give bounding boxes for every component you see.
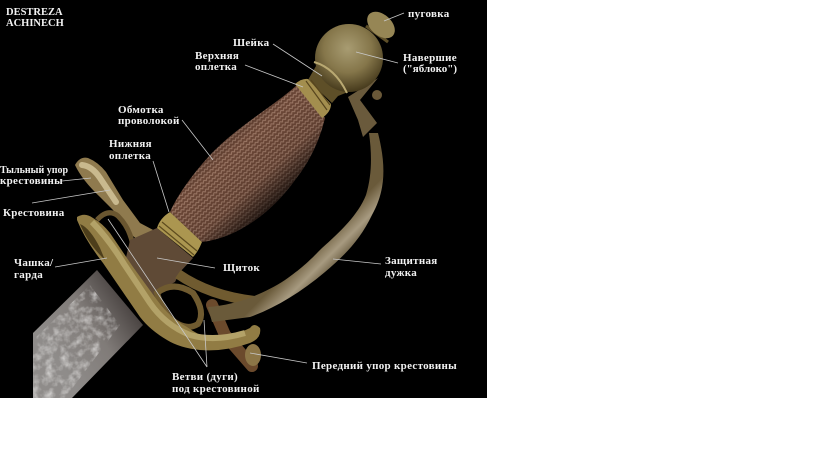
label: Щиток: Щиток xyxy=(223,262,260,274)
label: Крестовина: Крестовина xyxy=(3,207,65,219)
label: Чашка / гарда: Чашка/ xyxy=(14,257,53,269)
neck xyxy=(308,66,348,103)
front quillon tip xyxy=(245,344,261,366)
upper ferrule xyxy=(295,79,331,118)
label: Нижняя оплетка: Нижняя xyxy=(109,138,152,150)
label: Тыльный упор крестовины: Тыльный упор xyxy=(0,165,68,176)
label: Передний упор крестовины: Передний упор крестовины xyxy=(312,360,457,372)
label: Ветви (дуги) под крестовиной xyxy=(108,219,260,395)
shield / langet block xyxy=(125,228,193,310)
label: Обмотка проволокой xyxy=(118,104,213,160)
label: Нижняя оплетка: оплетка xyxy=(109,150,151,162)
label: Защитная дужка: дужка xyxy=(385,267,417,279)
lower ferrule xyxy=(157,212,202,257)
label: Тыльный упор крестовины: крестовины xyxy=(0,175,63,187)
label: Шейка: Шейка xyxy=(233,37,270,49)
title: DESTREZA xyxy=(6,7,63,18)
label: Нижняя оплетка xyxy=(109,138,169,212)
title: ACHINECH xyxy=(6,18,64,29)
bow finial xyxy=(348,78,382,137)
branch arm behind cup xyxy=(97,213,133,246)
sword illustration xyxy=(33,6,400,398)
rear quillon xyxy=(75,158,157,250)
button xyxy=(362,6,400,44)
label: Крестовина xyxy=(3,190,110,219)
label: Передний упор крестовины xyxy=(250,353,457,372)
label: Ветви (дуги) под крестовиной: Ветви (дуги) xyxy=(172,371,238,383)
label: Защитная дужка: Защитная xyxy=(385,255,438,267)
label: Чашка / гарда: гарда xyxy=(14,269,43,281)
black photo background xyxy=(0,0,487,398)
label: Ветви (дуги) под крестовиной: под крестовиной xyxy=(172,383,260,395)
label: Чашка / гарда xyxy=(14,257,107,281)
label: Навершие: Навершие xyxy=(403,52,457,64)
label: Навершие xyxy=(356,52,457,75)
label: Шейка xyxy=(233,37,322,76)
label: Обмотка проволокой: проволокой xyxy=(118,115,180,127)
label: Верхняя оплетка xyxy=(195,50,303,87)
label: Навершие: ("яблоко") xyxy=(403,63,457,75)
label: Верхняя оплетка: Верхняя xyxy=(195,50,239,62)
label: Тыльный упор крестовины xyxy=(0,165,91,187)
ring loop under the cross xyxy=(157,286,201,327)
wire-wrapped grip xyxy=(170,85,325,242)
arm toward front quillon xyxy=(212,305,252,366)
label: Обмотка проволокой: Обмотка xyxy=(118,104,164,116)
pommel xyxy=(315,24,383,92)
label: Защитная дужка xyxy=(333,255,438,279)
label: Верхняя оплетка: оплетка xyxy=(195,61,237,73)
label: пуговка: пуговка xyxy=(408,8,450,20)
guard cup xyxy=(77,215,260,350)
blade xyxy=(33,270,143,398)
label: Щиток xyxy=(157,258,260,274)
label: пуговка xyxy=(384,8,450,21)
knuckle bow xyxy=(208,133,383,322)
